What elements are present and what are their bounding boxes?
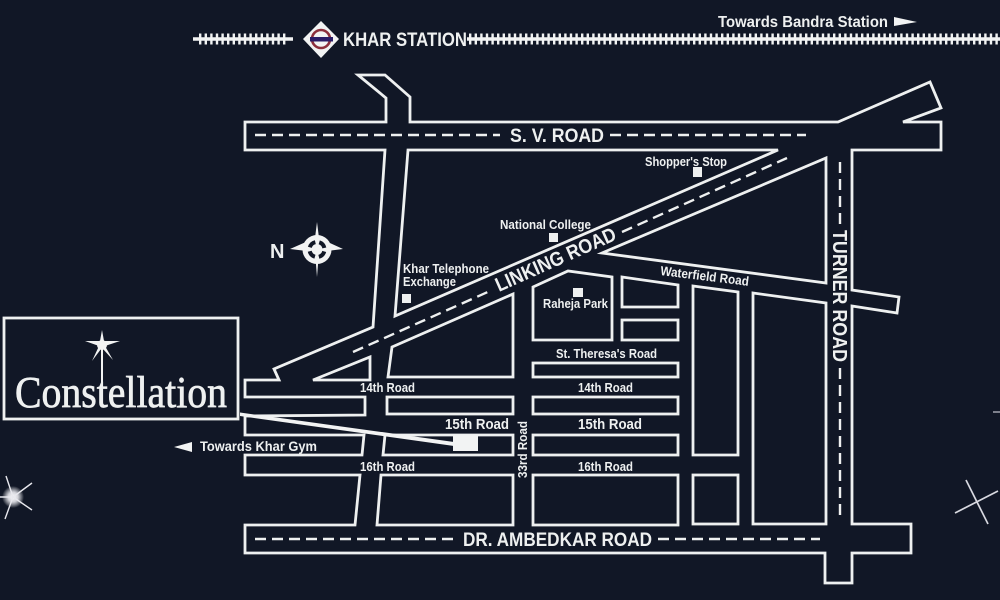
label: towards Khar Gym: Towards Khar Gym (200, 438, 317, 454)
label: towards Bandra Station: Towards Bandra Station (718, 14, 888, 31)
road label: Turner Road: TURNER ROAD (828, 230, 850, 362)
road label: 16th Road west: 16th Road (360, 459, 415, 474)
arrow: towards Bandra (894, 17, 917, 26)
road label: S. V. Road: S. V. ROAD (510, 126, 604, 147)
block: 16th middle (377, 475, 513, 525)
landmark: Khar Telephone Exchange: Exchange (403, 274, 456, 289)
heading: Khar Station: KHAR STATION (343, 30, 467, 51)
block: tall narrow (693, 286, 738, 455)
road label: 15th Road west: 15th Road (445, 416, 509, 433)
block: below Linking Road (388, 294, 513, 377)
logo wordmark: Constellation (15, 368, 227, 417)
road label: 15th Road east: 15th Road (578, 416, 642, 433)
block: 15th middle (383, 435, 513, 455)
block: 15th right (533, 435, 678, 455)
landmark: Khar Telephone Exchange (402, 261, 489, 303)
road label: Linking Road: LINKING ROAD (492, 224, 620, 297)
road label: 14th Road west: 14th Road (360, 380, 415, 395)
icon: right edge sparkle (993, 411, 1000, 413)
block: lower small (622, 320, 678, 340)
road label: 33rd Road: 33rd Road (515, 421, 530, 478)
icon: logo star (85, 330, 120, 396)
block: small square (693, 475, 738, 524)
road label: St. Theresa's Road: St. Theresa's Road (556, 346, 657, 361)
road centre dashes (255, 135, 840, 539)
icon: right sparkle (955, 480, 998, 524)
landmark: Khar Telephone Exchange: Khar Telephone (403, 261, 489, 276)
block: small triangle (313, 357, 370, 380)
landmark: National College: National College (500, 217, 591, 232)
compass (270, 222, 343, 277)
road network outline (245, 75, 941, 583)
block: 14th middle (387, 397, 513, 414)
route to site (240, 412, 478, 451)
landmark: Raheja Park (543, 288, 609, 311)
block: Raheja Park (533, 271, 612, 340)
icon: station roundel (303, 21, 339, 58)
block: 16th right (533, 475, 678, 525)
landmark: Shopper's Stop (645, 154, 727, 177)
icon: left sparkle (0, 476, 32, 519)
railway track (193, 37, 1000, 41)
road label: Waterfield Road: Waterfield Road (660, 263, 750, 289)
landmark: Shopper's Stop: Shopper's Stop (645, 154, 727, 169)
block: St Theresa's (533, 363, 678, 377)
block: east triangle (602, 158, 826, 283)
panel: Constellation logo (4, 318, 238, 419)
road label: Dr. Ambedkar Road: DR. AMBEDKAR ROAD (463, 530, 652, 551)
landmark: Raheja Park: Raheja Park (543, 296, 609, 311)
landmark: National College (500, 217, 591, 242)
block: tall wide (753, 293, 826, 524)
road label: 16th Road east: 16th Road (578, 459, 633, 474)
compass: N (270, 241, 284, 263)
block: north triangle (395, 150, 778, 316)
road label: 14th Road east: 14th Road (578, 380, 633, 395)
site marker (453, 435, 478, 451)
block: upper small (622, 277, 678, 307)
block: 14th right (533, 397, 678, 414)
arrow: towards Khar Gym (174, 442, 192, 452)
